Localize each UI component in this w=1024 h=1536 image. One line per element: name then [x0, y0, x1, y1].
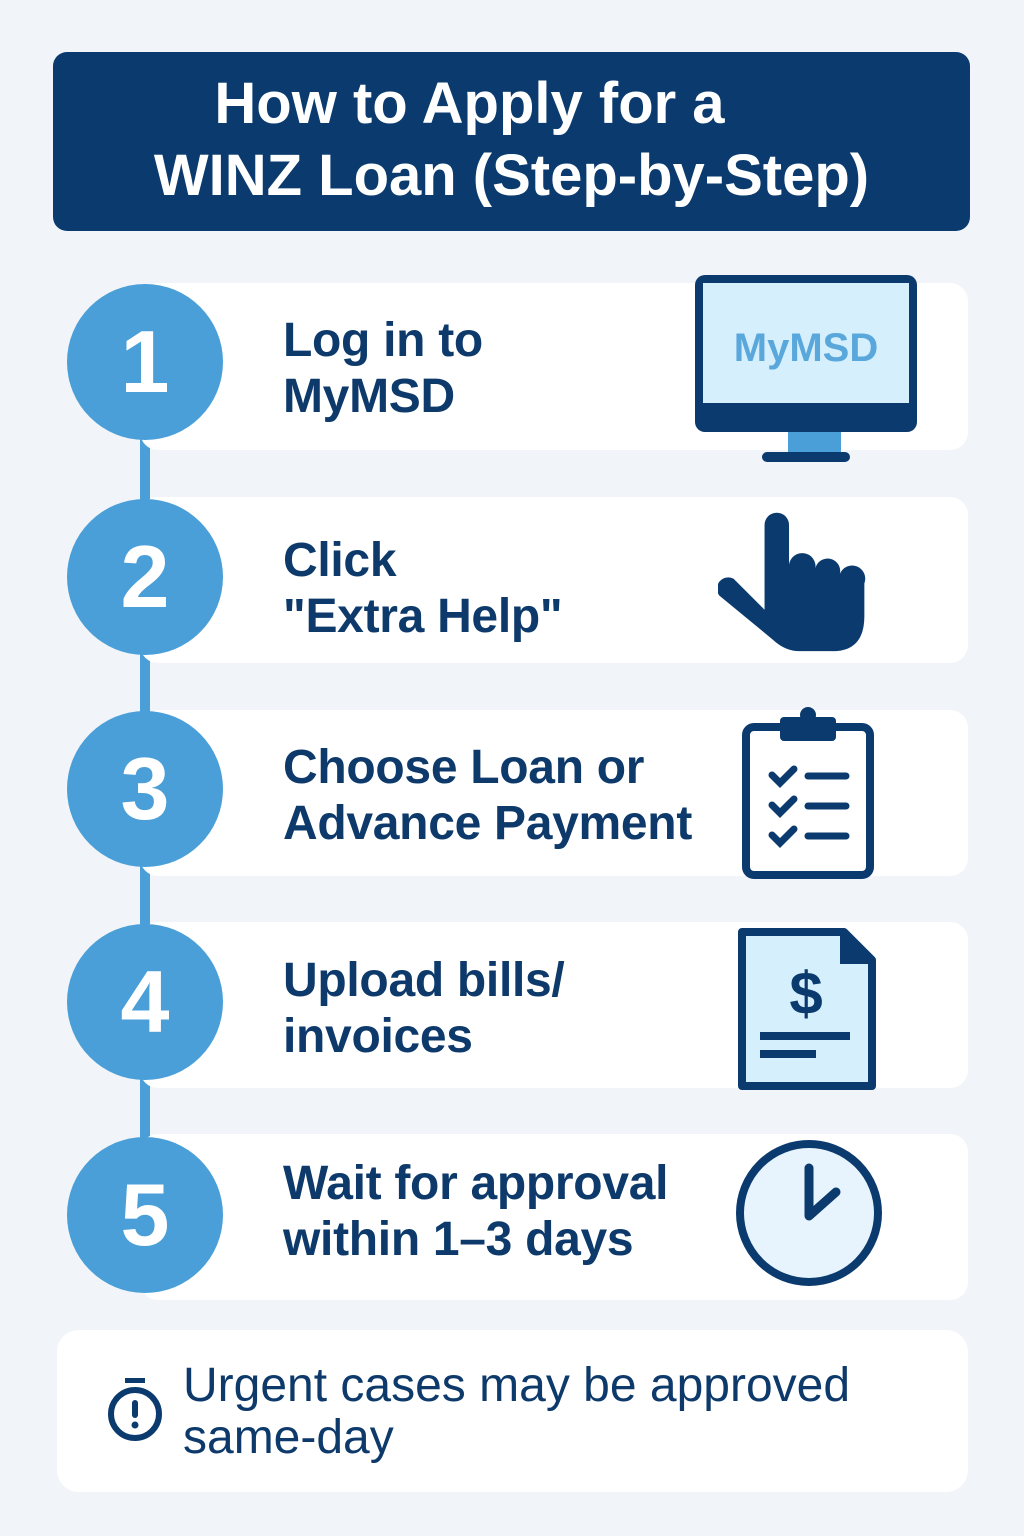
step 2 card [140, 497, 968, 663]
icon: monitor [695, 275, 917, 462]
step 3 text: Choose Loan or [283, 741, 644, 794]
step 1 text: MyMSD [283, 370, 455, 423]
icon: invoice document [738, 928, 876, 1090]
step 2 text: "Extra Help" [283, 590, 562, 643]
title banner: WINZ Loan (Step-by-Step) [154, 143, 869, 208]
step 4 text: invoices [283, 1010, 473, 1063]
step 4 text: Upload bills/ [283, 954, 564, 1007]
circle 1 [67, 284, 223, 440]
title banner [53, 52, 970, 231]
step 3 card [140, 710, 968, 876]
step 1 text [283, 314, 483, 423]
circle 3: 3 [121, 739, 169, 838]
step 2 text [283, 534, 562, 643]
callout text: Urgent cases may be approved [183, 1359, 850, 1412]
circle 5: 5 [121, 1165, 169, 1264]
connector line [140, 380, 150, 1200]
circle 2: 2 [121, 527, 169, 626]
circle 4: 4 [121, 952, 169, 1051]
circle 1: 1 [121, 312, 169, 411]
step 1 text: Log in to [283, 314, 483, 367]
icon: pointing hand [718, 512, 866, 652]
icon: clipboard checklist [742, 707, 874, 879]
title banner: How to Apply for a [214, 71, 725, 136]
icon: invoice document: $ [789, 960, 823, 1027]
icon: stopwatch alert [108, 1378, 162, 1441]
step 4 card [140, 922, 968, 1088]
step 1 card [140, 283, 968, 450]
circle 4 [67, 924, 223, 1080]
step 5 text: within 1–3 days [283, 1213, 633, 1266]
callout text: same-day [183, 1411, 394, 1464]
step 5 text: Wait for approval [283, 1157, 668, 1210]
step 3 text: Advance Payment [283, 797, 692, 850]
circle 5 [67, 1137, 223, 1293]
step 4 text [283, 954, 564, 1063]
circle 3 [67, 711, 223, 867]
step 3 text [283, 741, 692, 850]
callout: urgent note [57, 1330, 968, 1492]
step 2 text: Click [283, 534, 396, 587]
circle 2 [67, 499, 223, 655]
callout text [183, 1359, 850, 1464]
icon: clock [736, 1140, 882, 1286]
icon: monitor: MyMSD [734, 326, 878, 370]
step 5 card [140, 1134, 968, 1300]
step 5 text [282, 1157, 668, 1266]
